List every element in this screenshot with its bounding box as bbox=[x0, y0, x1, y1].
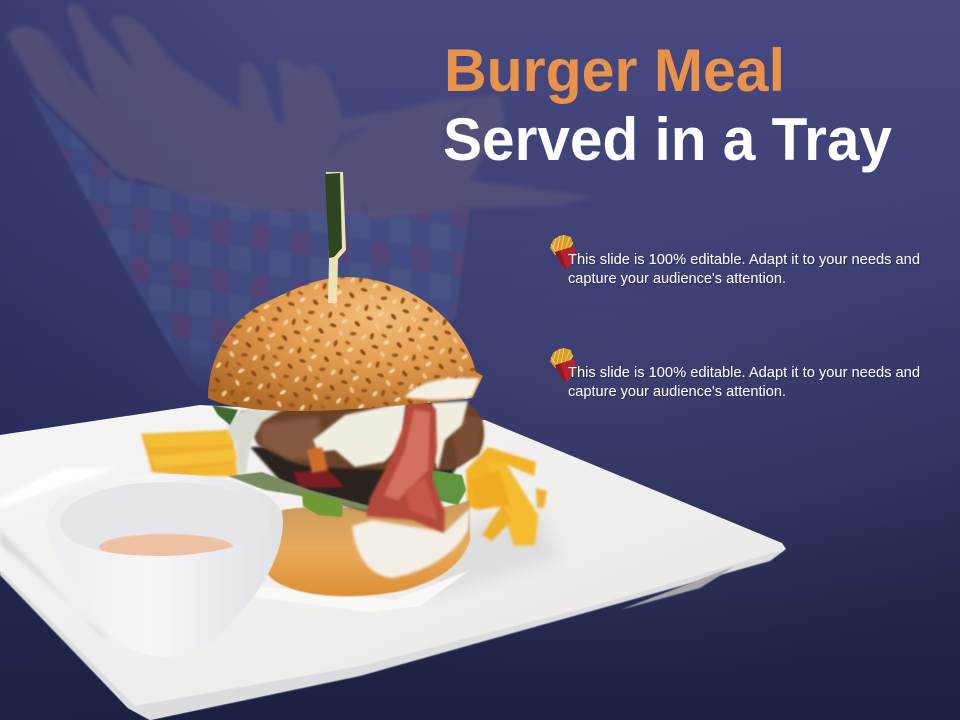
plate top bbox=[0, 405, 786, 720]
dark filling bbox=[250, 440, 470, 512]
bowl body bbox=[47, 474, 283, 657]
title: Served in a Tray bbox=[443, 106, 893, 173]
paper under burger bbox=[255, 570, 470, 612]
bun crumb bbox=[352, 508, 470, 578]
title bbox=[443, 37, 893, 173]
top bun bbox=[208, 277, 483, 411]
bullet 2 bbox=[550, 348, 920, 400]
text: bullet 1: This slide is 100% editable. Adapt it to your needs and bbox=[568, 252, 920, 268]
bottom bun bbox=[265, 500, 470, 596]
bowl inner bbox=[60, 482, 270, 556]
napkin bbox=[0, 468, 120, 508]
sauce bowl bbox=[47, 474, 283, 657]
text: bullet 2: capture your audience's attention. bbox=[568, 384, 786, 400]
ghost fries bbox=[6, 4, 595, 220]
bacon bbox=[366, 402, 445, 533]
fries on plate bbox=[141, 430, 547, 546]
plate bbox=[0, 405, 786, 720]
sesame seeds bbox=[208, 277, 482, 411]
icon: fries 2 bbox=[550, 348, 576, 382]
text: bullet 2: This slide is 100% editable. Adapt it to your needs and bbox=[568, 365, 920, 381]
patty bbox=[240, 405, 484, 470]
bun bite crumb bbox=[405, 378, 480, 400]
plate shadow near burger bbox=[420, 510, 560, 600]
icon: fries 1 bbox=[550, 235, 576, 269]
skewer bbox=[325, 172, 346, 303]
cheese bbox=[228, 401, 468, 473]
burger bbox=[200, 172, 490, 596]
title: Burger Meal bbox=[444, 37, 785, 104]
bullet 1 bbox=[550, 235, 920, 287]
text: bullet 1: capture your audience's attention. bbox=[568, 271, 786, 287]
left fries bbox=[141, 430, 238, 476]
lettuce and avocado bbox=[212, 405, 466, 517]
fry highlights bbox=[38, 28, 470, 155]
basket checks bbox=[28, 88, 470, 392]
plate rim shade bbox=[0, 549, 786, 720]
faded fries basket bbox=[6, 4, 595, 392]
sauce bbox=[98, 534, 234, 556]
right fries bbox=[466, 447, 547, 546]
